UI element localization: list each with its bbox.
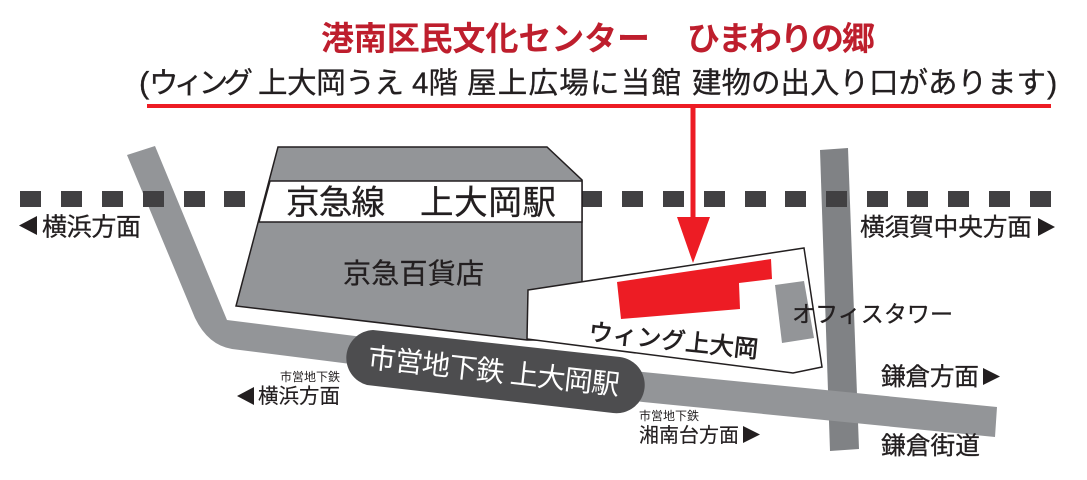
subtitle [139,65,1057,100]
road label: Kamakura Kaido: 鎌倉街道 [881,432,980,460]
subtitle: ( [139,65,150,100]
subway direction: Shonandai: 市営地下鉄 [639,408,699,423]
subway direction: Yokohama: 横浜方面 [258,385,340,408]
direction label: Yokohama: 横浜方面 [42,214,141,242]
station label band: 上大岡駅 [420,185,556,222]
red venue rooftop [617,259,772,319]
subtitle: ウィング [149,67,253,100]
vertical road [820,148,859,451]
railway dashed line: right section [581,191,1051,207]
red underline [147,104,1051,108]
station label band [259,181,582,222]
subway station pill: 市営地下鉄 上大岡駅 [366,342,621,401]
direction label: Kamakura: 鎌倉方面 [881,363,979,391]
subway direction: Yokohama: 市営地下鉄 [280,369,340,384]
railway dashed line: left section [20,191,245,207]
Wing Kamiooka label: ウィング上大岡 [587,319,759,364]
direction label: Yokosuka-Chuo: 横須賀中央方面 [860,214,1032,242]
subtitle: 建物の出入り口があります [692,67,1046,100]
subway station pill [346,330,645,413]
title: 港南区民文化センター [321,20,650,57]
subtitle: ) [1047,65,1057,100]
subtitle: 4階 [412,67,458,100]
arrow to venue [677,106,710,263]
office tower label: オフィスタワー [792,301,953,327]
department store label: 京急百貨店 [343,258,484,289]
subway direction: Yokohama [237,369,340,408]
title [321,20,875,57]
office tower block [775,281,814,343]
Wing Kamiooka building [527,248,822,373]
subtitle: 屋上広場に当館 [467,67,681,100]
road: Kamakura Kaido [127,146,997,437]
subway direction: Shonandai [639,408,760,447]
Keikyu department store building [236,147,582,340]
title: ひまわりの郷 [687,20,875,57]
subtitle: 上大岡うえ [258,67,404,100]
subway direction: Shonandai: 湘南台方面 [639,424,739,447]
station label band: 京急線 [286,185,385,222]
